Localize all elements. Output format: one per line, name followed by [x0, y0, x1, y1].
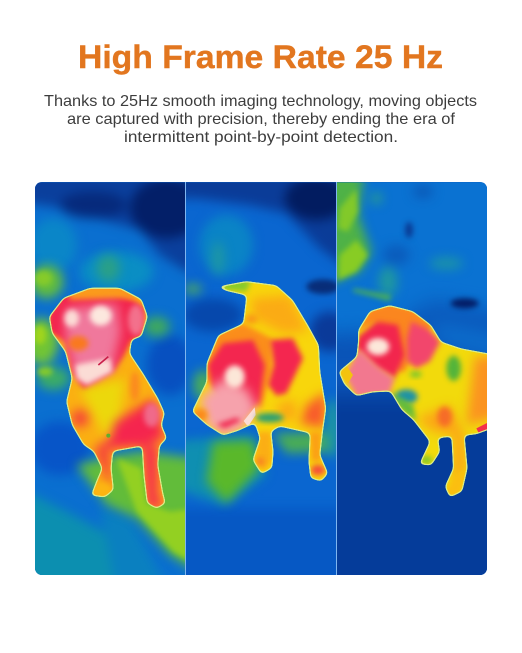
frame divider lines — [186, 182, 336, 575]
thermal frame 2: standing dog, head lowered — [186, 182, 336, 575]
description text: intermittent point-by-point detection. — [124, 129, 398, 146]
description text — [44, 93, 477, 146]
thermal image panel — [35, 182, 487, 575]
description text: are captured with precision, thereby ending the era of — [67, 111, 456, 128]
description text: Thanks to 25Hz smooth imaging technology, moving objects — [44, 93, 477, 110]
thermal frame 3: standing dog in profile — [337, 182, 487, 575]
dog 3 — [340, 306, 487, 496]
title: High Frame Rate 25 Hz — [78, 39, 443, 75]
thermal frame 1: dog sitting, facing down — [35, 182, 185, 575]
dog 2 — [193, 281, 328, 481]
dog 1 — [49, 288, 166, 508]
